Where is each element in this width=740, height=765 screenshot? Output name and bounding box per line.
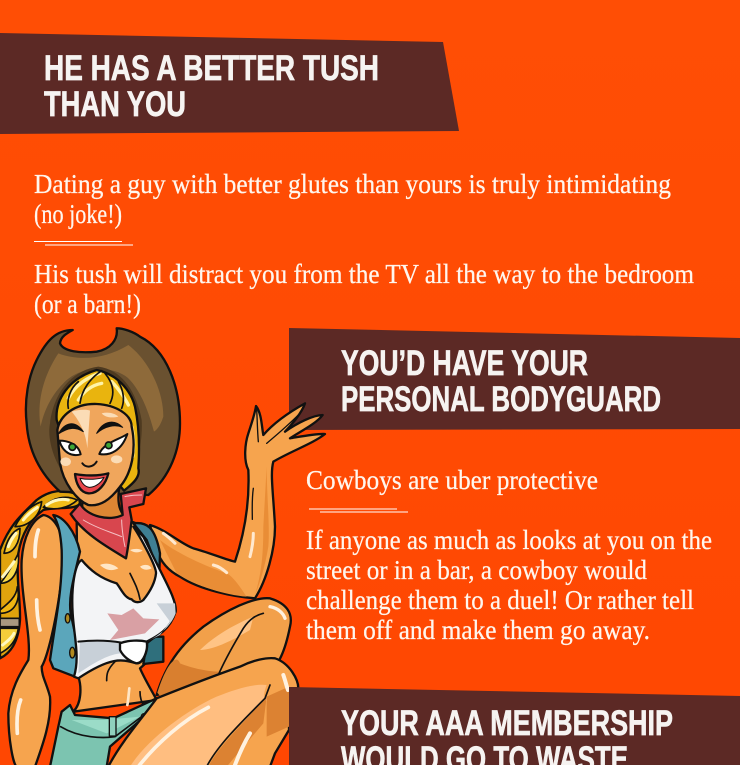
heading: he has a better tush than you	[44, 49, 379, 124]
text block: glutes: (no joke!)	[34, 199, 122, 229]
chest highlights	[100, 549, 152, 570]
braid	[0, 491, 80, 658]
neck	[80, 487, 125, 520]
bandana	[71, 488, 146, 558]
midriff lines	[107, 662, 143, 705]
text block: distraction	[34, 259, 694, 319]
face	[57, 404, 134, 505]
text block: protective: Cowboys are uber protective	[306, 465, 598, 495]
heading: he has a better tush than you: THAN YOU	[44, 85, 186, 124]
text block: duel: challenge them to a duel! Or rather tell	[306, 585, 694, 615]
shorts	[50, 698, 162, 765]
panel: better tush	[0, 33, 694, 319]
illustration: cowgirl	[0, 328, 325, 765]
heading: your aaa membership would go to waste	[341, 704, 673, 765]
white top	[72, 527, 176, 678]
hair	[57, 370, 139, 491]
front thigh	[108, 658, 298, 765]
panel: aaa membership	[289, 687, 740, 765]
hat	[26, 328, 180, 495]
heading banner: aaa membership	[289, 687, 740, 765]
text block: duel: them off and make them go away.	[306, 615, 650, 645]
raised knee	[157, 598, 291, 700]
waving arm	[150, 403, 325, 598]
text block: glutes: Dating a guy with better glutes than yours is truly intimidating	[34, 169, 671, 199]
text block: duel	[306, 525, 712, 645]
text block: duel: street or in a bar, a cowboy would	[306, 555, 647, 585]
heading banner: better tush	[0, 33, 459, 134]
heading banner: bodyguard	[289, 328, 740, 430]
heading: you'd have your personal bodyguard: YOU’D HAVE YOUR	[341, 344, 588, 383]
text block: glutes	[34, 169, 671, 229]
left arm	[8, 515, 63, 765]
vest	[50, 515, 163, 677]
text block: distraction: (or a barn!)	[34, 289, 141, 319]
text block: duel: If anyone as much as looks at you on the	[306, 525, 712, 555]
panel: bodyguard	[289, 328, 740, 645]
text block: distraction: His tush will distract you from the TV all the way to the bedroom	[34, 259, 694, 289]
torso	[73, 517, 163, 712]
heading: he has a better tush than you: HE HAS A BETTER TUSH	[44, 49, 379, 88]
heading: you'd have your personal bodyguard	[341, 344, 661, 419]
